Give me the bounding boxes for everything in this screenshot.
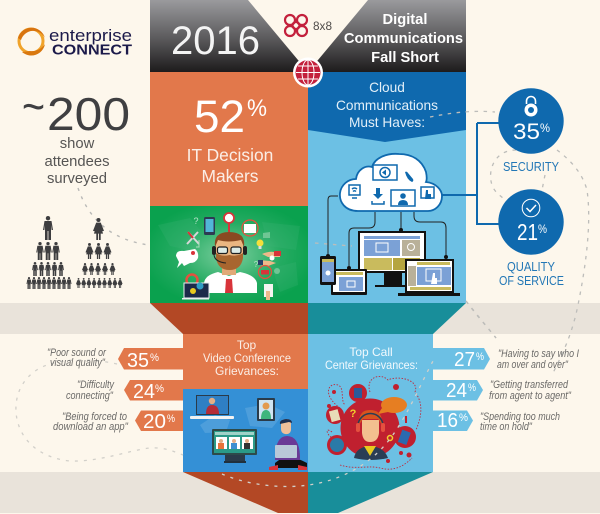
statistic: show attendees: show xyxy=(60,136,95,152)
quotes: video conference xyxy=(47,347,129,433)
percentages: video conference xyxy=(127,350,175,433)
panel: cloud communications: Communications xyxy=(336,98,438,113)
header: left dark panel xyxy=(150,0,308,72)
percentages: video conference: 24 xyxy=(133,381,155,403)
panel: video conference grievances xyxy=(118,334,308,431)
percentages: video conference: % xyxy=(167,413,175,425)
quotes: call center: "Getting transferred xyxy=(490,379,569,391)
people pyramid: women xyxy=(76,218,123,288)
circle: security: SECURITY xyxy=(503,159,559,174)
band: lower xyxy=(0,472,600,513)
panel: IT decision makers: 52 xyxy=(194,91,245,142)
percentages: call center: % xyxy=(459,412,468,424)
statistic: show attendees xyxy=(22,80,130,187)
circle: quality of service: QUALITY xyxy=(507,259,555,274)
circle: quality of service xyxy=(498,189,564,288)
panel: green illustration xyxy=(150,206,308,303)
quotes: video conference: "Being forced to xyxy=(62,411,127,423)
icon: agent xyxy=(204,232,257,293)
statistic: show attendees: surveyed xyxy=(47,171,107,187)
percentages: call center: % xyxy=(468,382,476,394)
dotted connector: cloud to security and right column xyxy=(315,111,589,375)
quotes: video conference: "Difficulty xyxy=(77,379,115,391)
trapezoid: brown upper xyxy=(150,303,308,334)
dotted connector: lower right xyxy=(466,301,496,338)
circle: quality of service: 21 xyxy=(517,219,538,245)
quotes: call center: am over and over" xyxy=(497,359,569,371)
statistic: show attendees: ~ xyxy=(22,80,45,132)
percentages: video conference: % xyxy=(155,383,164,395)
band: upper xyxy=(0,303,600,334)
panel: cloud communications xyxy=(308,72,466,303)
percentages: call center: 16 xyxy=(437,410,458,432)
trapezoid: brown lower xyxy=(183,472,308,513)
panel: IT decision makers: IT Decision xyxy=(187,145,273,165)
percentages: call center: % xyxy=(476,351,484,363)
panel: video conference grievances: Top xyxy=(237,338,256,352)
circle: security xyxy=(498,88,564,174)
logo: enterprise connect: enterprise xyxy=(49,27,132,45)
panel: video conference grievances: Grievances: xyxy=(215,364,279,378)
panel: video conference illustration xyxy=(183,389,308,472)
icon: floating support symbols xyxy=(176,213,281,300)
title: Fall Short xyxy=(371,50,439,66)
quotes: video conference: connecting" xyxy=(66,390,114,402)
panel: cloud communications: Must Haves: xyxy=(349,115,425,130)
title xyxy=(344,12,463,66)
trapezoid: teal lower xyxy=(308,472,433,513)
header: right dark panel xyxy=(308,0,466,72)
quotes: call center: time on hold" xyxy=(480,421,533,433)
percentages: call center: 27 xyxy=(454,349,475,371)
icon: floating support symbols: ? xyxy=(193,216,199,226)
trapezoid: teal upper xyxy=(308,303,466,334)
circle: security: 35 xyxy=(513,119,540,144)
dotted connector: lower loop xyxy=(16,360,433,486)
logo: 8x8: 8x8 xyxy=(313,19,332,33)
logo: enterprise connect: CONNECT xyxy=(52,42,132,58)
quotes: call center: from agent to agent" xyxy=(489,390,572,402)
percentages: video conference: % xyxy=(150,352,159,364)
statistic: show attendees: attendees xyxy=(44,154,110,170)
quotes: video conference: visual quality" xyxy=(50,357,106,369)
dotted connector: attendees to decision makers xyxy=(78,188,148,245)
logo: enterprise connect xyxy=(18,27,132,58)
quotes: call center: "Having to say who I xyxy=(498,348,579,360)
circle: quality of service: % xyxy=(538,222,547,236)
icon: call center agent: ? xyxy=(350,408,357,420)
panel: call center grievances: Top Call xyxy=(349,345,393,359)
panel: call center grievances: Center Grievances: xyxy=(325,358,418,372)
icon: padlock xyxy=(524,96,538,116)
panel: video conference grievances: Video Conference xyxy=(203,351,291,365)
icon: cloud xyxy=(340,154,442,211)
statistic: show attendees: 200 xyxy=(47,88,130,140)
connector: cloud to circles xyxy=(442,123,505,224)
circle: security: % xyxy=(540,121,550,135)
quotes: video conference: download an app" xyxy=(53,421,129,433)
quotes: video conference: "Poor sound or xyxy=(47,347,107,359)
wires: cloud to devices xyxy=(328,196,446,268)
panel: IT decision makers xyxy=(150,72,308,207)
badge: globe xyxy=(293,58,323,88)
percentages: video conference: 20 xyxy=(143,411,166,433)
percentages: call center: 24 xyxy=(446,380,467,402)
quotes: call center: "Spending too much xyxy=(480,411,560,423)
panel: IT decision makers: Makers xyxy=(201,166,259,186)
icon: devices xyxy=(320,228,460,296)
year heading: 2016 xyxy=(171,19,260,63)
icon: floating support symbols: ? xyxy=(254,260,259,269)
panel: IT decision makers: % xyxy=(247,95,267,122)
icon: call center agent xyxy=(326,376,421,469)
logo: 8x8 xyxy=(285,15,332,36)
quotes: call center xyxy=(480,348,579,433)
panel: call center grievances xyxy=(308,334,490,472)
percentages: call center xyxy=(437,349,484,432)
title: Communications xyxy=(344,31,463,47)
percentages: video conference: 35 xyxy=(127,350,149,372)
circle: quality of service: OF SERVICE xyxy=(499,273,564,288)
panel: cloud communications: Cloud xyxy=(369,80,405,95)
icon: check xyxy=(522,199,540,217)
title: Digital xyxy=(383,12,427,28)
people pyramid: men xyxy=(26,216,72,289)
